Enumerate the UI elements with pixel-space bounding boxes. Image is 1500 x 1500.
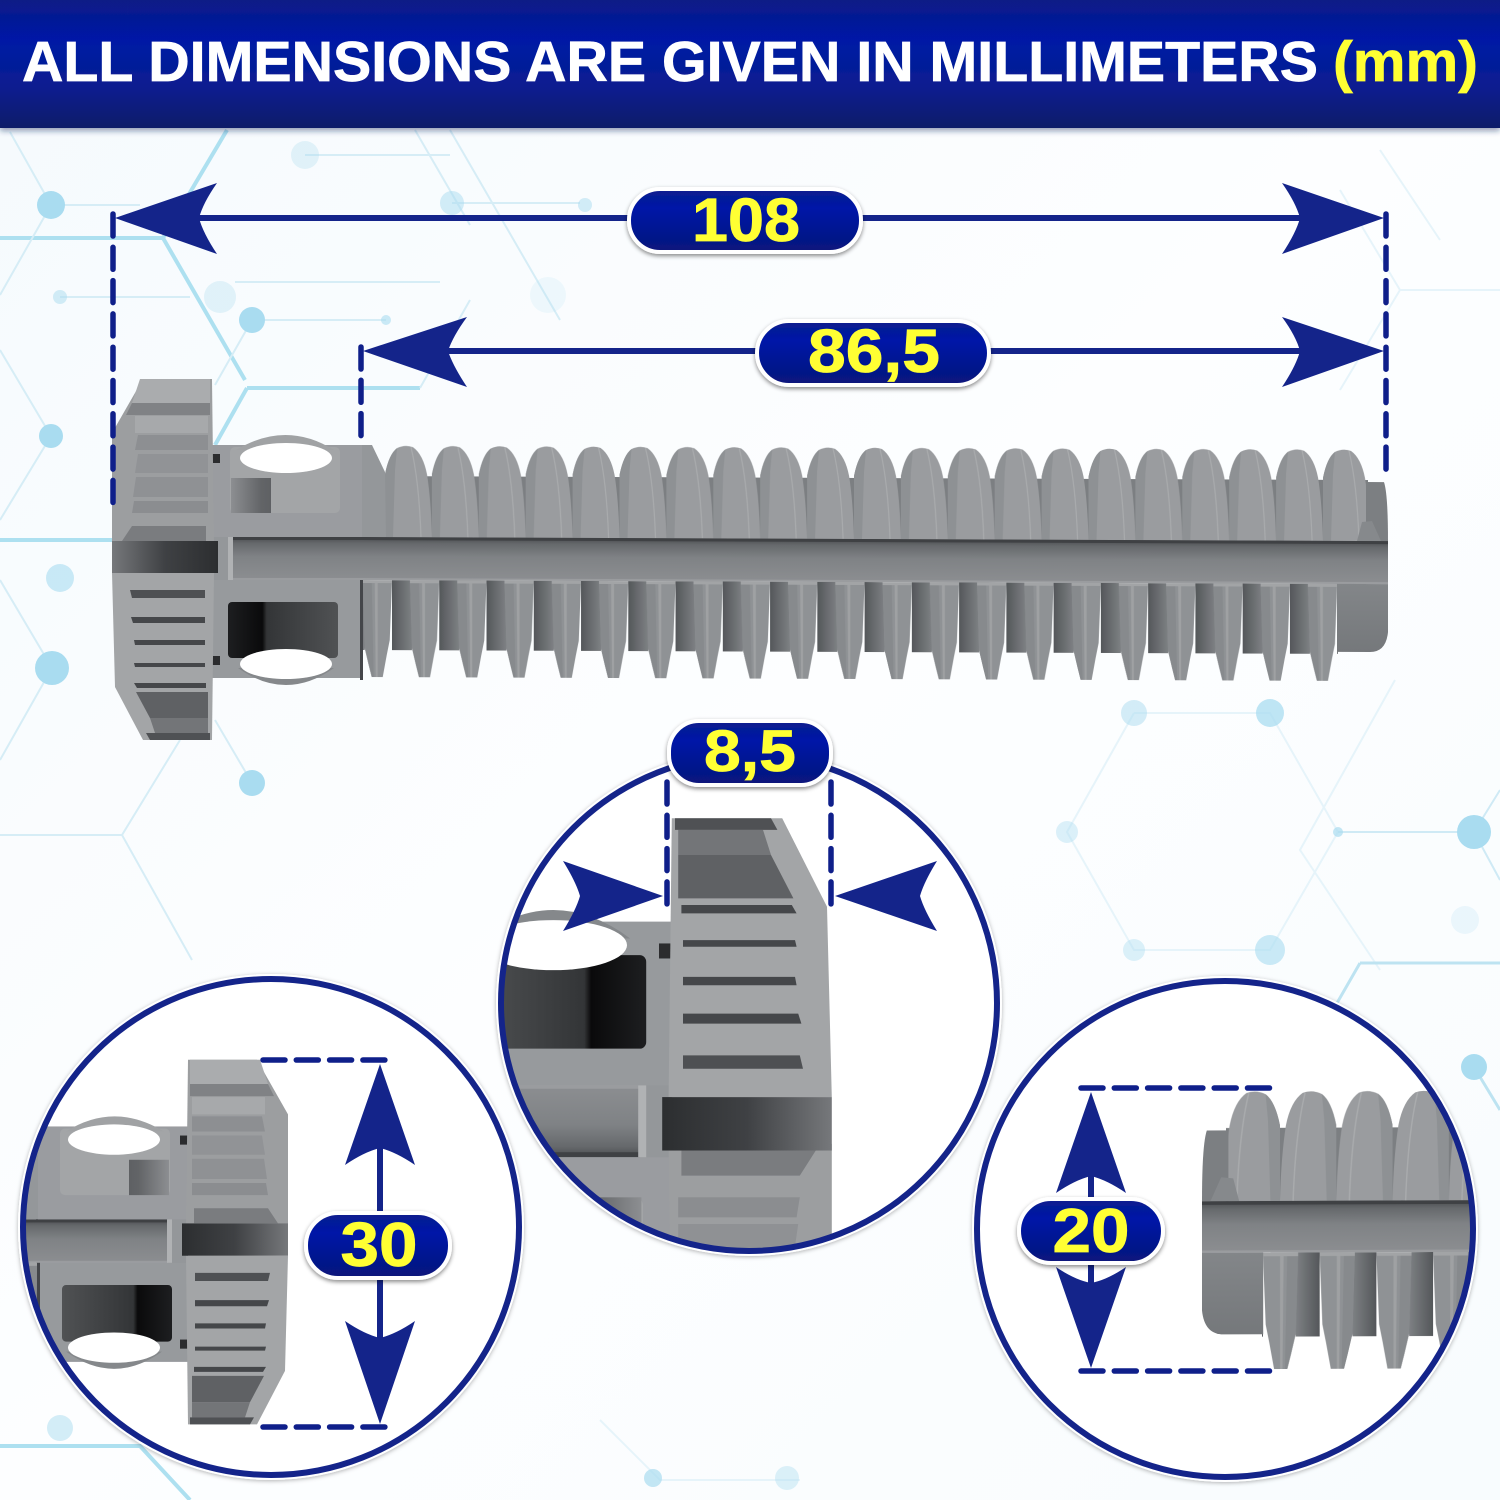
header banner	[0, 0, 1500, 128]
panel: head diameter detail 30: 30	[340, 1211, 418, 1280]
panel: thread diameter detail 20	[972, 976, 1500, 1482]
panel: head width detail 8,5	[494, 718, 1004, 1260]
dimension 86,5: 86,5	[808, 317, 940, 385]
dimension 108: 108	[692, 186, 800, 254]
dimension 108	[113, 183, 1386, 505]
panel: head width detail 8,5: 8,5	[704, 719, 796, 784]
unit: (mm)	[1333, 30, 1478, 94]
panel: head diameter detail 30	[0, 974, 524, 1480]
title: ALL DIMENSIONS ARE GIVEN IN MILLIMETERS	[22, 30, 1318, 94]
product: threaded bolt full view	[112, 379, 1388, 740]
dimension 86,5	[361, 317, 1384, 440]
panel: thread diameter detail 20: 20	[1052, 1197, 1130, 1266]
